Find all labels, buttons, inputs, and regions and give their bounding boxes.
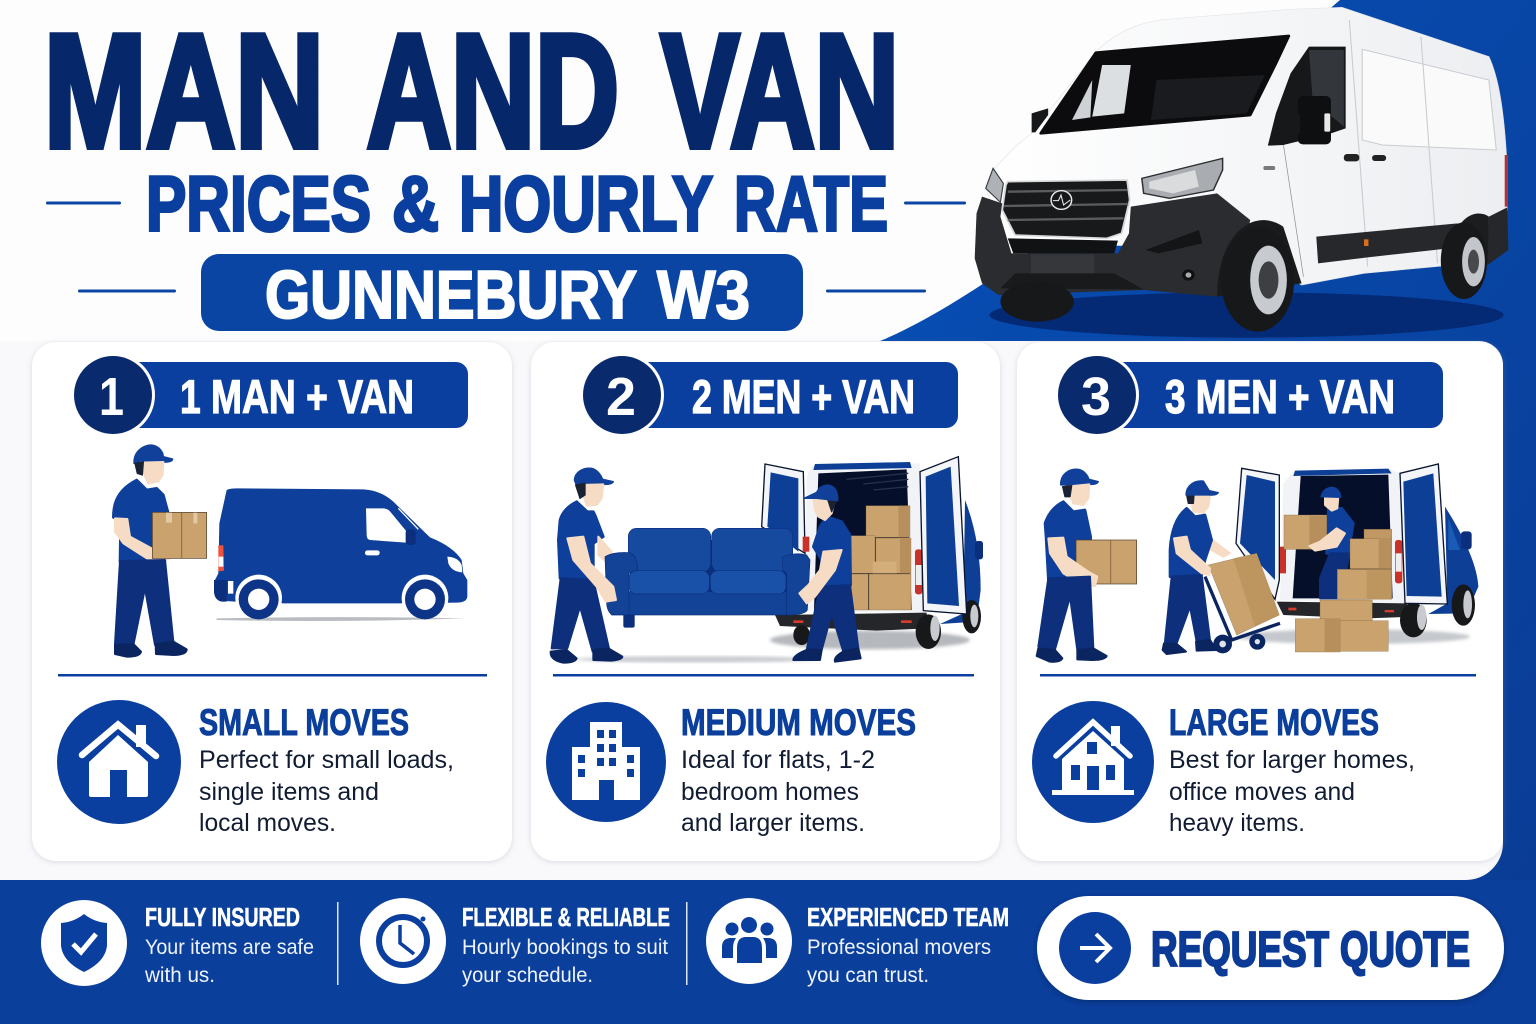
feature: flexible and reliable: FLEXIBLE & RELIABLE [462, 902, 670, 932]
feature: fully insured: with us. [144, 963, 215, 987]
location pill: Gunnebury W3 [78, 254, 926, 333]
text: medium moves: bedroom homes [681, 778, 859, 806]
text: large moves: Best for larger homes, [1169, 746, 1415, 774]
button: request quote: QUOTE [1340, 923, 1470, 977]
subtitle with rules: PRICES [146, 160, 371, 248]
feature: fully insured: Your items are safe [145, 935, 314, 959]
feature: flexible and reliable: your schedule. [462, 963, 593, 987]
title: MAN AND VAN: MAN [44, 2, 324, 182]
illustration: two movers carrying sofa to open van [551, 457, 983, 663]
subtitle with rules [46, 160, 966, 248]
text: large moves [1169, 702, 1415, 837]
card heading: 2 men + van: 2 [606, 367, 636, 427]
subtitle with rules: HOURLY [459, 160, 713, 248]
text: medium moves: Ideal for flats, 1-2 [681, 746, 875, 774]
illustration: three movers loading boxes into van [1037, 464, 1478, 662]
feature: fully insured [41, 900, 314, 987]
text: large moves: heavy items. [1169, 809, 1305, 837]
button: request quote [1037, 896, 1504, 1000]
white content area [0, 341, 1503, 880]
icon: apartment building [546, 702, 666, 822]
subtitle with rules: & [392, 160, 439, 248]
illustration: mover with box beside van silhouette [113, 445, 467, 657]
feature: experienced team: you can trust. [807, 963, 929, 987]
title: MAN AND VAN: AND [367, 2, 619, 182]
panel: 3 men + van [1017, 342, 1503, 861]
icon: house [57, 700, 181, 824]
card heading: 1 man + van [71, 353, 468, 437]
text: small moves [199, 702, 454, 837]
feature: experienced team [706, 898, 1009, 987]
card heading: 2 men + van [580, 353, 958, 437]
feature: fully insured: FULLY INSURED [145, 902, 300, 932]
card heading: 3 men + van: 3 MEN + VAN [1165, 370, 1395, 423]
panel: 2 men + van [531, 342, 1000, 861]
text: medium moves: MEDIUM MOVES [681, 702, 916, 743]
subtitle with rules: RATE [734, 160, 888, 248]
text: small moves: SMALL MOVES [199, 702, 409, 743]
location pill: Gunnebury W3: GUNNEBURY [265, 257, 637, 333]
panel: 1 man + van [32, 342, 512, 861]
icon: shield [41, 900, 127, 986]
text: small moves: Perfect for small loads, [199, 746, 454, 774]
feature: experienced team: Professional movers [807, 935, 991, 959]
feature: flexible and reliable [360, 898, 670, 987]
text: large moves: LARGE MOVES [1169, 702, 1379, 743]
icon: team [706, 898, 792, 984]
icon: house with windows [1032, 701, 1154, 823]
card heading: 3 men + van: 3 [1081, 367, 1111, 427]
feature: flexible and reliable: Hourly bookings to suit [462, 935, 668, 959]
text: large moves: office moves and [1169, 778, 1355, 806]
card heading: 1 man + van: 1 MAN + VAN [180, 370, 414, 423]
title: MAN AND VAN: VAN [661, 2, 899, 182]
text: small moves: local moves. [199, 809, 336, 837]
text: medium moves [681, 702, 916, 837]
card heading: 1 man + van: 1 [99, 367, 124, 427]
button: request quote: REQUEST [1151, 923, 1329, 977]
text: medium moves: and larger items. [681, 809, 865, 837]
hero white van photo illustration [975, 7, 1508, 338]
card heading: 3 men + van [1055, 353, 1443, 437]
card heading: 2 men + van: 2 MEN + VAN [692, 370, 915, 423]
bottom features band [0, 880, 1536, 1024]
icon: clock [360, 898, 446, 984]
blue swoosh background [880, 0, 1536, 900]
title: MAN AND VAN [44, 2, 899, 182]
text: small moves: single items and [199, 778, 379, 806]
icon: arrow [1059, 912, 1131, 984]
feature: experienced team: EXPERIENCED TEAM [807, 902, 1009, 932]
location pill: Gunnebury W3: W3 [657, 257, 750, 333]
